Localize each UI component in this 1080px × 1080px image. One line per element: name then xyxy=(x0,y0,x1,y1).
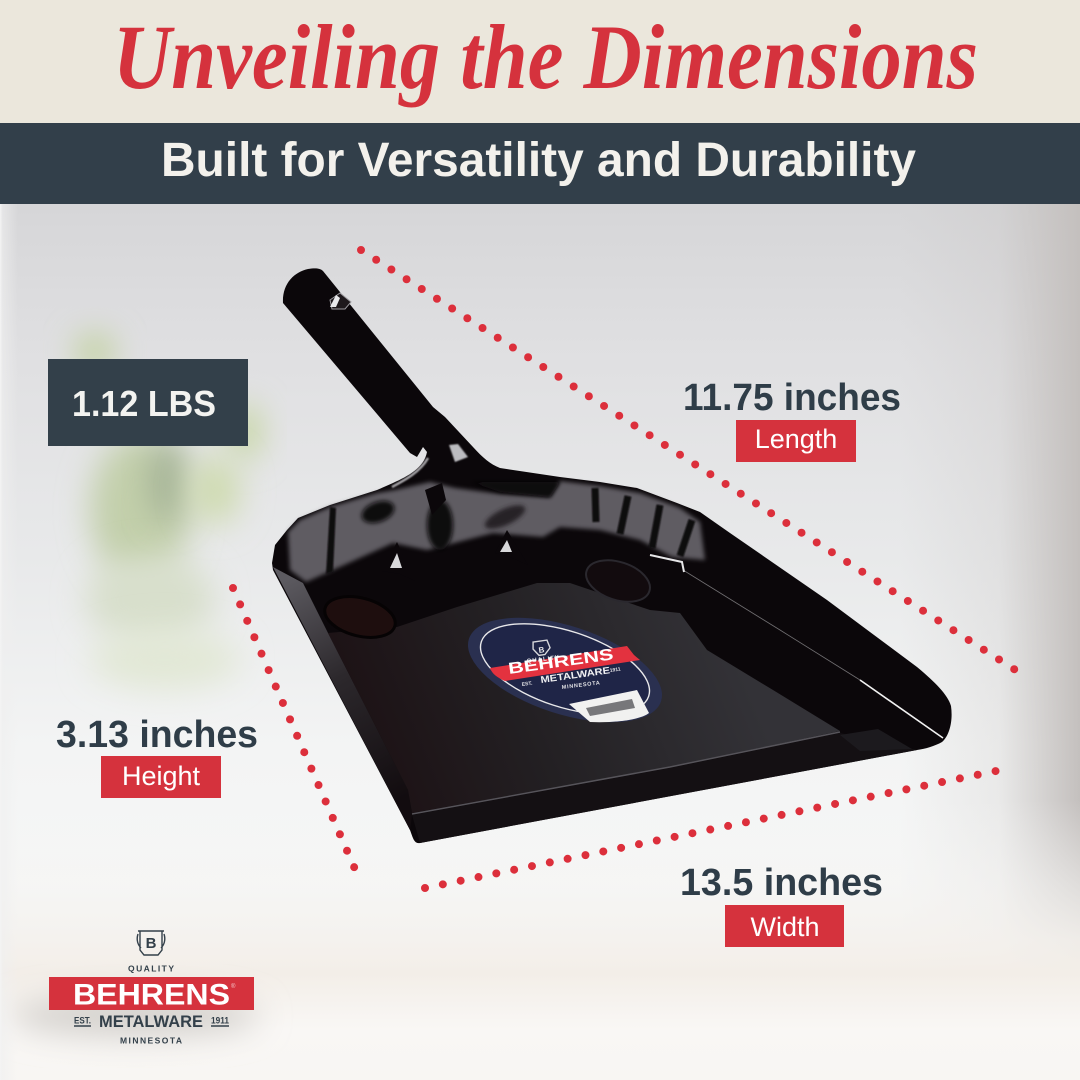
subtitle: Built for Versatility and Durability xyxy=(161,134,916,187)
title band xyxy=(0,0,1080,123)
front lip xyxy=(412,733,917,843)
callout: length: 11.75 inches xyxy=(683,377,901,419)
dustpan product photo xyxy=(272,268,952,843)
side crease xyxy=(683,570,943,738)
callout: height: 3.13 inches xyxy=(56,714,258,756)
brand logo: METALWARE xyxy=(99,1012,203,1031)
title: Unveiling the Dimensions xyxy=(113,6,978,108)
callout: height: Height xyxy=(122,761,201,791)
product label sticker: EST. xyxy=(521,680,533,688)
subtitle band xyxy=(0,123,1080,204)
brand logo: BEHRENS xyxy=(73,978,230,1012)
product label sticker: QUALITY xyxy=(527,655,560,665)
product label sticker: BEHRENS xyxy=(507,646,615,678)
icon: bucket xyxy=(137,931,165,955)
weight badge xyxy=(48,359,248,446)
dotted line: height xyxy=(233,588,358,876)
pan floor xyxy=(328,583,840,813)
handle highlights xyxy=(449,444,468,462)
left wall xyxy=(273,567,412,830)
dotted line: length xyxy=(361,250,1017,671)
brand logo: ® xyxy=(231,983,236,990)
fluted ridges xyxy=(595,488,692,556)
brand logo xyxy=(49,931,254,1046)
product label sticker: METALWARE xyxy=(540,665,611,686)
product label sticker: B xyxy=(538,645,545,655)
callout: width: 13.5 inches xyxy=(680,862,883,904)
product label sticker xyxy=(455,597,675,743)
dotted line: width xyxy=(425,771,996,888)
brand logo: QUALITY xyxy=(128,964,174,974)
callout: width xyxy=(680,862,883,947)
icon: bucket: B xyxy=(146,935,157,952)
callout: length xyxy=(683,377,901,462)
callout: width: Width xyxy=(750,912,820,942)
stamped dimples xyxy=(320,590,400,644)
weight badge: 1.12 LBS xyxy=(72,383,216,424)
callout: length: Length xyxy=(755,424,837,454)
product label sticker: MINNESOTA xyxy=(562,680,601,691)
callout: height xyxy=(56,714,258,798)
back wall gloss xyxy=(288,481,705,582)
pan silhouette xyxy=(272,268,952,843)
brand logo: 1911 xyxy=(211,1016,229,1026)
rivets xyxy=(382,530,528,581)
brand logo: EST. xyxy=(74,1016,91,1026)
product label sticker: 1911 xyxy=(609,666,621,674)
brand logo: MINNESOTA xyxy=(120,1036,182,1046)
